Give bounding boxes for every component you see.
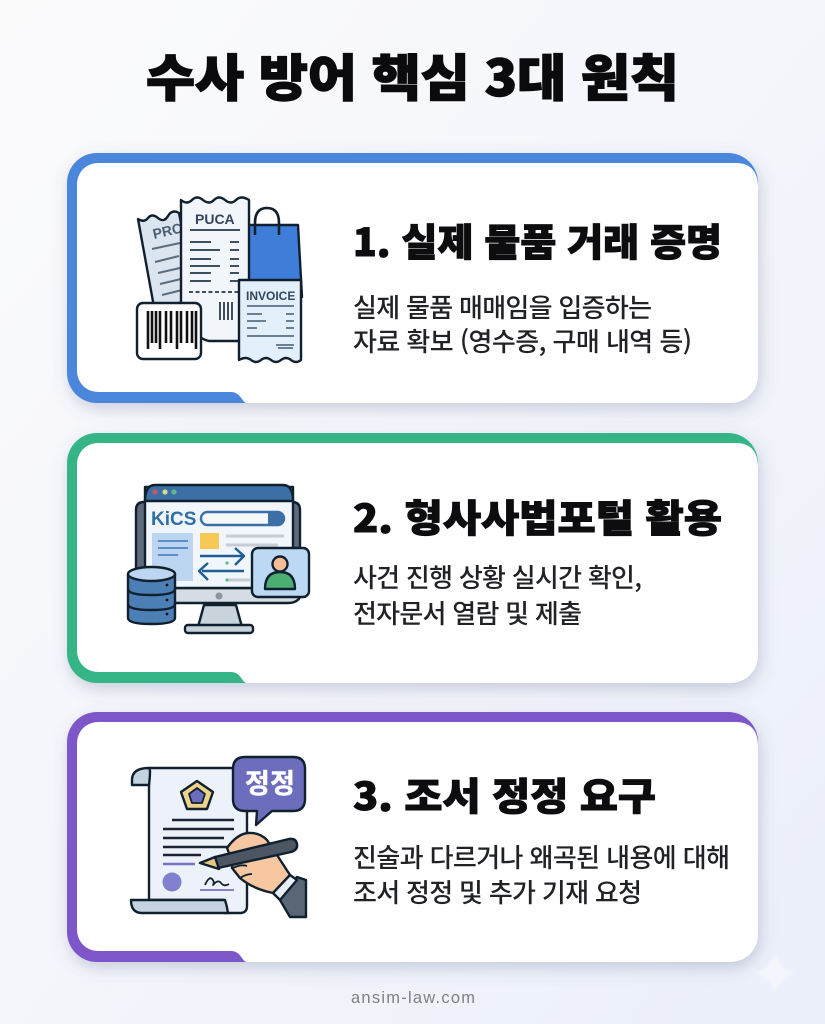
description 3: 조서 정정 및 추가 기재 요청 bbox=[353, 873, 642, 910]
description 2: 사건 진행 상황 실시간 확인, bbox=[353, 558, 642, 595]
panel: card 3 record correction bbox=[67, 712, 758, 962]
description 3 bbox=[353, 838, 730, 910]
icon: monitor, database and user: KiCS bbox=[151, 509, 196, 530]
panel: card 2 KICS portal bbox=[67, 433, 758, 683]
icon: scroll, speech bubble and signing hand: 정정 bbox=[245, 762, 295, 801]
description 1: 실제 물품 매매임을 입증하는 bbox=[353, 288, 652, 325]
description 2: 전자문서 열람 및 제출 bbox=[353, 594, 582, 631]
icon: receipts, shopping bag and invoice: PRC bbox=[151, 220, 183, 242]
footer website: ansim-law.com bbox=[351, 989, 475, 1007]
panel: card 1 physical goods bbox=[67, 153, 758, 403]
icon: monitor, database and user bbox=[128, 485, 309, 633]
description 3: 진술과 다르거나 왜곡된 내용에 대해 bbox=[353, 838, 730, 875]
card 1 frame bbox=[67, 153, 758, 403]
card 3 frame bbox=[67, 712, 758, 962]
heading 1: 1. 실제 물품 거래 증명 bbox=[353, 212, 722, 267]
title: 수사 방어 핵심 3대 원칙 bbox=[146, 39, 679, 111]
heading 2: 2. 형사사법포털 활용 bbox=[353, 488, 722, 543]
icon: receipts, shopping bag and invoice: INVOICE bbox=[246, 289, 295, 303]
heading 3: 3. 조서 정정 요구 bbox=[353, 766, 656, 821]
icon: receipts, shopping bag and invoice: PUCA bbox=[195, 211, 235, 227]
card 2 frame bbox=[67, 433, 758, 683]
description 1: 자료 확보 (영수증, 구매 내역 등) bbox=[353, 322, 692, 359]
description 2 bbox=[353, 558, 642, 631]
icon: scroll, speech bubble and signing hand bbox=[131, 757, 306, 917]
description 1 bbox=[353, 288, 692, 359]
icon: receipts, shopping bag and invoice bbox=[137, 198, 302, 362]
icon: sparkle bbox=[754, 952, 796, 994]
